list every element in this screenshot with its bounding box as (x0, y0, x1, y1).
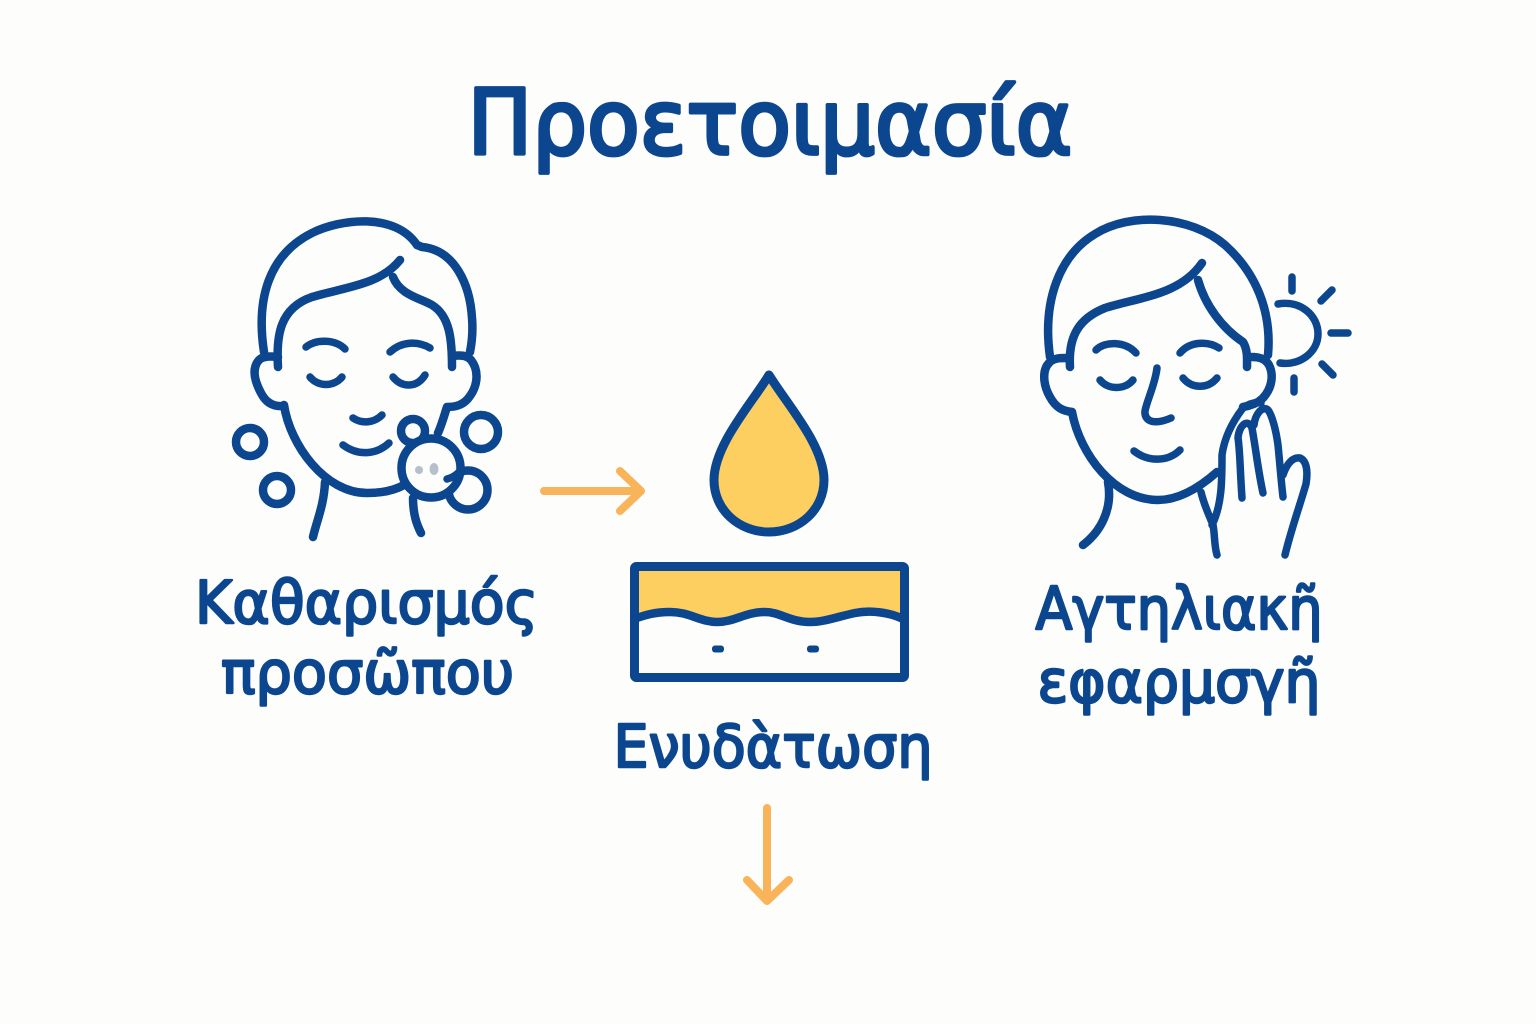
icon: skin layers (634, 566, 905, 678)
arrow: down (747, 808, 789, 901)
icon: oil drop (714, 375, 824, 532)
hand (1201, 492, 1217, 555)
soap bubble (402, 438, 460, 498)
icon: face cleansing (236, 221, 498, 537)
arrow: right (544, 471, 641, 511)
icon: sunscreen face (1044, 220, 1348, 555)
heading: face cleansing: Καθαρισμός (195, 568, 538, 637)
title: Προετοιμασία (468, 71, 1072, 176)
heading: hydration: Ενυδὰτωση (614, 712, 932, 781)
heading: face cleansing second line: προσῶπου (221, 638, 514, 707)
heading: sunscreen: Αγτηλιακῆ (1036, 574, 1322, 643)
sun (1278, 303, 1318, 363)
heading: sunscreen second line: εφαρμσγῆ (1038, 647, 1320, 716)
